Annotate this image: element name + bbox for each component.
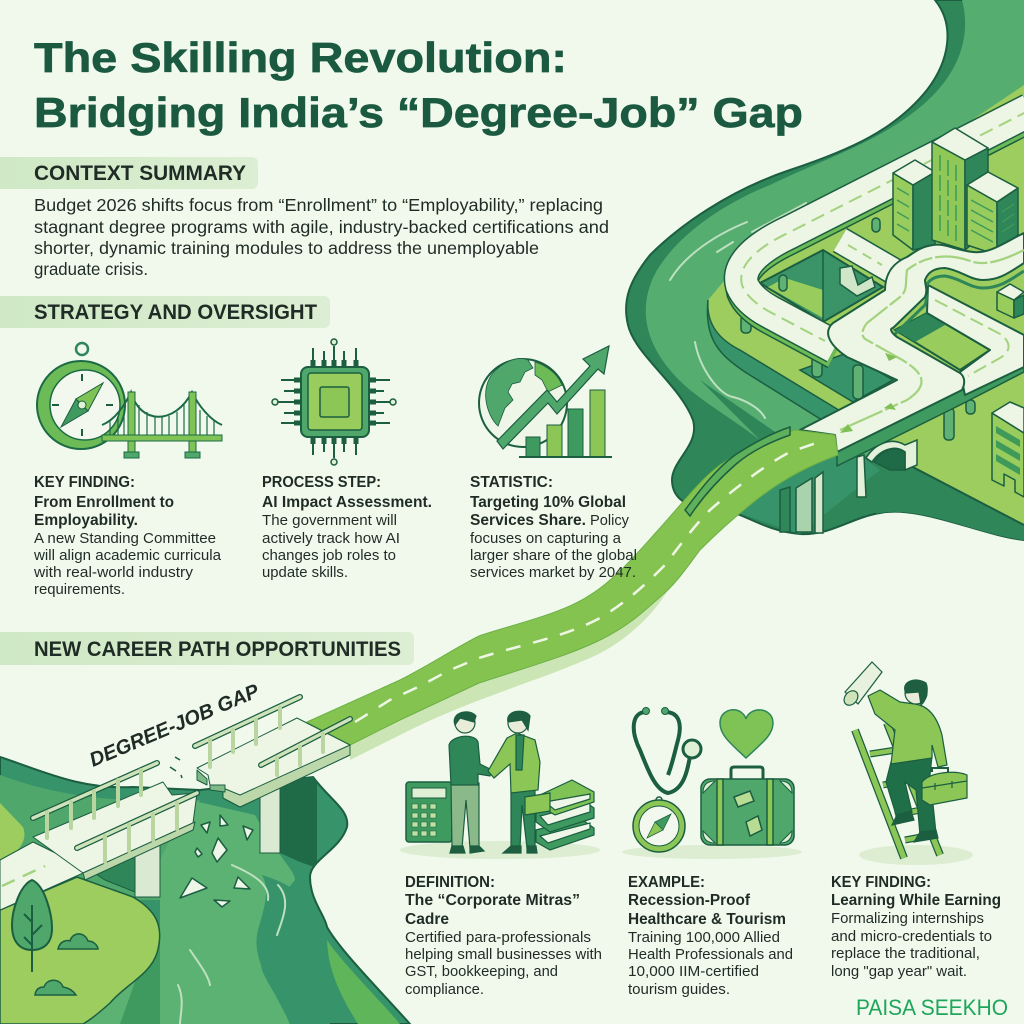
illustration: lime road connecting gap to city <box>307 427 838 760</box>
strategy column 3 text <box>470 474 637 581</box>
strategy column 2 text: actively track how AI <box>262 530 400 547</box>
building small far right <box>997 284 1024 318</box>
context summary text: shorter, dynamic training modules to address the unemployable <box>34 238 539 258</box>
heading: context summary: CONTEXT SUMMARY <box>34 161 246 185</box>
person <box>868 680 947 842</box>
road pillars <box>741 218 975 533</box>
context summary text: graduate crisis. <box>34 259 148 279</box>
strategy column 3 text: larger share of the global <box>470 547 637 564</box>
strategy column 2 text: changes job roles to <box>262 547 396 564</box>
ladder <box>855 723 940 858</box>
strategy column 1 text: with real-world industry <box>33 564 194 581</box>
career column 1 text <box>405 874 602 998</box>
left bridge section <box>33 763 197 880</box>
icon: healthcare and tourism <box>622 708 802 859</box>
briefcase <box>525 793 550 815</box>
gap label: DEGREE-JOB GAP <box>86 680 263 772</box>
stethoscope <box>634 708 701 793</box>
heading: context summary <box>0 157 258 189</box>
small compass <box>633 797 685 852</box>
strategy column 3 text: focuses on capturing a <box>470 530 622 547</box>
calculator <box>406 782 452 842</box>
area inside upper loop <box>760 250 883 322</box>
upper loop road <box>741 110 1024 347</box>
lime platform <box>707 85 1024 525</box>
context summary text <box>34 195 609 279</box>
heading: new career path opportunities <box>0 632 414 665</box>
brand logo: PAISA SEEKHO <box>856 995 1008 1020</box>
strategy column 3 text: services market by 2047. <box>470 564 636 581</box>
career column 2 text: Healthcare & Tourism <box>628 911 786 928</box>
books <box>536 780 594 850</box>
strategy column 3 text: STATISTIC: <box>470 474 553 491</box>
canyon ground <box>0 757 410 1024</box>
building tall <box>932 128 988 250</box>
career column 1 text: helping small businesses with <box>405 946 602 963</box>
career column 1 text: compliance. <box>405 981 484 998</box>
suitcase <box>701 767 794 845</box>
career column 1 text: The “Corporate Mitras” <box>405 892 580 909</box>
career column 3 text: replace the traditional, <box>831 945 980 962</box>
icon: AI chip <box>272 339 396 465</box>
title: Bridging India’s “Degree-Job” Gap <box>34 89 803 136</box>
lime bank upper <box>0 803 24 863</box>
growth arrow <box>497 346 609 449</box>
roads <box>741 110 1024 395</box>
strategy column 1 text <box>33 474 222 598</box>
career column 2 text: Recession-Proof <box>628 892 751 909</box>
area inside right loop <box>895 313 990 370</box>
career column 3 text: Learning While Earning <box>831 892 1001 909</box>
building lower right <box>992 402 1024 497</box>
career column 1 text: Certified para-professionals <box>405 929 591 946</box>
title <box>34 34 803 136</box>
compass <box>37 343 125 449</box>
heading: new career path opportunities: NEW CAREER PATH OPPORTUNITIES <box>34 637 401 661</box>
strategy column 1 text: will align academic curricula <box>33 547 222 564</box>
strategy column 1 text: Employability. <box>34 512 138 529</box>
icon: compass and bridge <box>37 343 222 458</box>
strategy column 1 text: A new Standing Committee <box>34 530 216 547</box>
career column 2 text: 10,000 IIM-certified <box>628 963 759 980</box>
career column 3 text: Formalizing internships <box>831 910 984 927</box>
building right <box>967 172 1018 255</box>
short connector road <box>840 240 895 272</box>
heading: strategy and oversight: STRATEGY AND OVERSIGHT <box>34 300 317 324</box>
context summary text: Budget 2026 shifts focus from “Enrollment” to “Employability,” replacing <box>34 195 603 215</box>
strategy column 2 text: update skills. <box>262 564 348 581</box>
career column 2 text: Training 100,000 Allied <box>628 929 780 946</box>
building left <box>893 160 935 250</box>
left road dash <box>2 866 45 886</box>
road undersides <box>741 117 1024 466</box>
strategy column 3 text: Targeting 10% Global <box>470 494 626 511</box>
man in dark suit <box>449 712 492 853</box>
strategy column 1 text: KEY FINDING: <box>34 474 135 491</box>
strategy column 1 text: requirements. <box>34 581 125 598</box>
suspension bridge <box>102 392 222 458</box>
career column 2 text <box>628 874 793 998</box>
right loop road <box>927 285 1024 395</box>
right bridge section <box>195 697 350 807</box>
area below junction <box>800 353 893 402</box>
left road section <box>0 842 90 910</box>
strategy column 2 text: The government will <box>262 512 397 529</box>
growth bars <box>519 390 612 457</box>
falling debris <box>170 757 253 907</box>
strategy column 2 text: AI Impact Assessment. <box>262 494 432 511</box>
icon: person climbing ladder <box>841 662 973 865</box>
heart <box>720 710 773 758</box>
lime bank lower <box>0 877 160 1024</box>
career column 3 text: and micro-credentials to <box>831 928 992 945</box>
bridge piers <box>90 788 280 897</box>
career column 2 text: EXAMPLE: <box>628 874 705 891</box>
tree <box>12 880 52 972</box>
career column 2 text: Health Professionals and <box>628 946 793 963</box>
icon: handshake, calculator and books <box>400 711 600 859</box>
career column 1 text: GST, bookkeeping, and <box>405 963 558 980</box>
career column 1 text: DEFINITION: <box>405 874 495 891</box>
illustration: broken bridge and canyon <box>0 680 410 1024</box>
career column 2 text: tourism guides. <box>628 981 730 998</box>
career column 1 text: Cadre <box>405 911 449 928</box>
career column 3 text <box>831 874 1001 980</box>
heading: strategy and oversight <box>0 296 330 328</box>
icon: globe and growth chart <box>479 346 612 457</box>
strategy column 2 text <box>262 474 432 581</box>
globe <box>479 358 567 447</box>
strategy column 1 text: From Enrollment to <box>34 494 174 511</box>
strategy column 2 text: PROCESS STEP: <box>262 474 381 491</box>
man in lime suit <box>488 711 540 853</box>
central road <box>800 233 1024 452</box>
river landscape <box>626 0 1024 600</box>
scroll <box>841 662 882 708</box>
bushes <box>35 934 98 995</box>
title: The Skilling Revolution: <box>34 34 567 81</box>
career column 3 text: long "gap year" wait. <box>831 963 967 980</box>
context summary text: stagnant degree programs with agile, industry-backed certifications and <box>34 217 609 237</box>
illustration: elevated road network and city <box>626 0 1024 600</box>
career column 3 text: KEY FINDING: <box>831 874 931 891</box>
strategy column 3 text: Services Share. <box>470 512 586 529</box>
toolbox <box>922 768 967 805</box>
city buildings <box>893 128 1024 497</box>
strategy column 3 text: Policy <box>590 512 629 529</box>
